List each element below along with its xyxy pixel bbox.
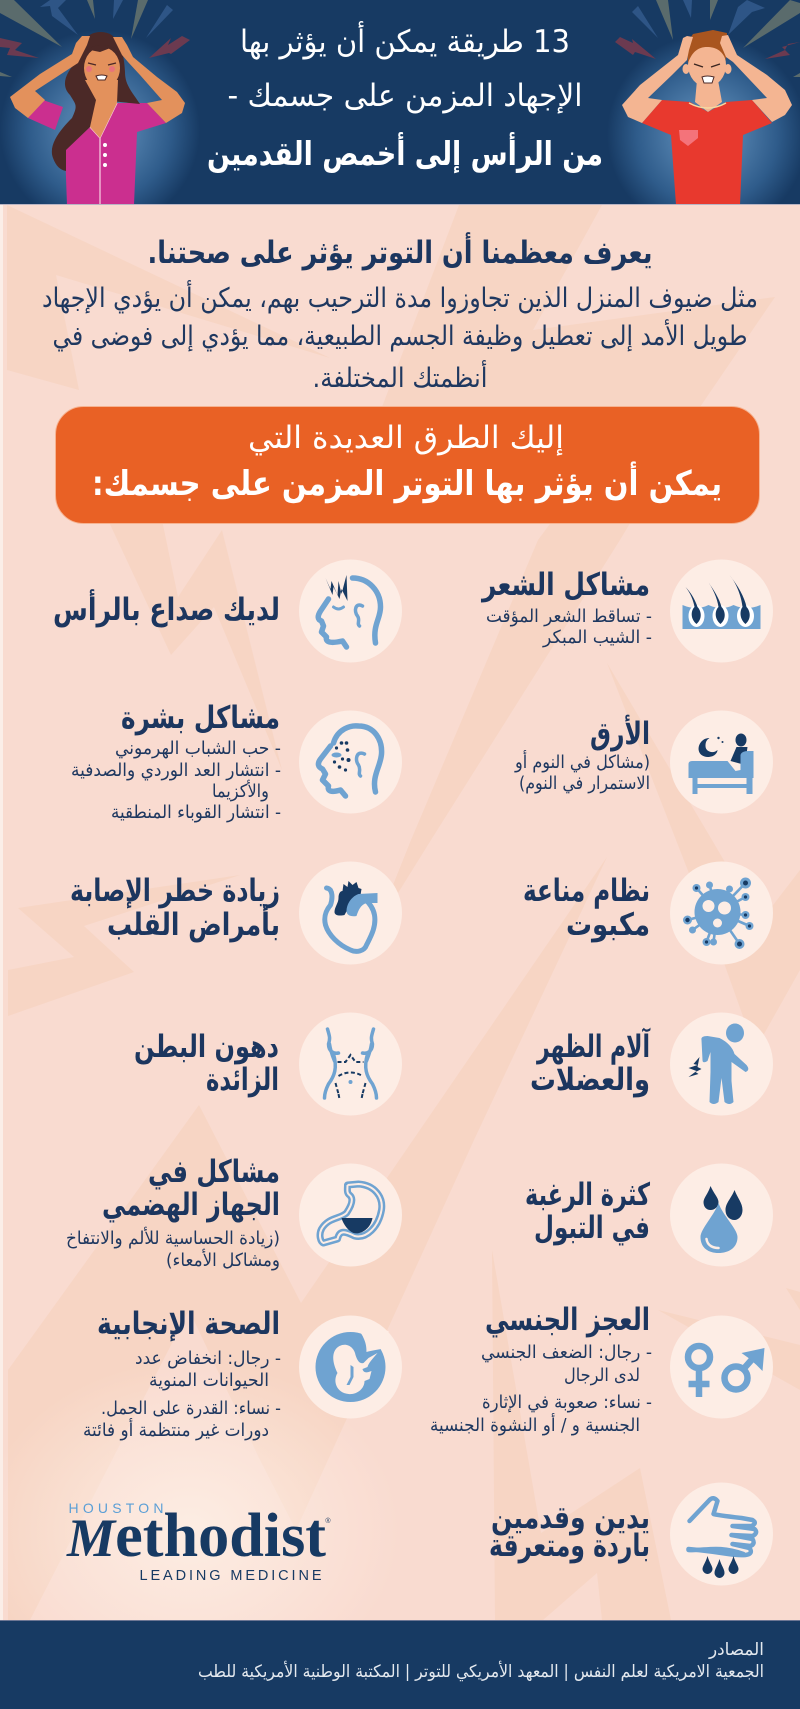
item: digestive problems [66, 1154, 402, 1271]
item: cold sweaty hands and feet: باردة ومتعرقة [489, 1528, 650, 1564]
item: sexual dysfunction: الجنسية و / أو النشوة الجنسية [430, 1413, 640, 1436]
icon: sleepless in bed [670, 710, 773, 814]
logo: Houston Methodist: ® [325, 1517, 331, 1525]
item: headache: لديك صداع بالرأس [53, 589, 280, 628]
item: back and muscle pain: والعضلات [530, 1062, 650, 1098]
illustration: stressed man [613, 0, 800, 204]
icon: heart [299, 862, 402, 964]
icon: fetus [299, 1316, 402, 1418]
item: reproductive health: دورات غير منتظمة أو فائتة [83, 1418, 269, 1441]
item: weak immune system: نظام مناعة [523, 873, 650, 909]
item: reproductive health: - رجال: انخفاض عدد [135, 1348, 281, 1369]
item: headache [53, 560, 402, 662]
callout: orange banner [56, 406, 760, 524]
item: digestive problems: الجهاز الهضمي [102, 1187, 280, 1223]
icon: drops [670, 1164, 773, 1266]
item: belly fat [134, 1012, 402, 1116]
item: insomnia: الاستمرار في النوم) [519, 773, 650, 794]
item: digestive problems: (زيادة الحساسية للألم والانتفاخ [66, 1227, 280, 1249]
item: frequent urination [525, 1164, 773, 1266]
title [207, 21, 603, 174]
item: sexual dysfunction: لدى الرجال [564, 1365, 640, 1386]
icon: head with lightning [299, 560, 402, 662]
item: back and muscle pain: آلام الظهر [536, 1027, 651, 1065]
logo: Houston Methodist: Methodist [66, 1502, 326, 1570]
item: sexual dysfunction: - نساء: صعوبة في الإثارة [482, 1392, 652, 1413]
item: skin problems: - حب الشباب الهرموني [115, 738, 281, 759]
item: heart disease: زيادة خطر الإصابة [70, 873, 280, 909]
item: belly fat: دهون البطن [134, 1029, 279, 1065]
title: 13 طريقة يمكن أن يؤثر بها [240, 21, 570, 60]
item: reproductive health: - نساء: القدرة على الحمل. [101, 1398, 281, 1419]
item: weak immune system: مكبوت [566, 907, 650, 943]
item: hair problems: - الشيب المبكر [542, 627, 652, 648]
item: heart disease [70, 862, 402, 964]
item: insomnia: (مشاكل في النوم أو [514, 750, 650, 773]
item: digestive problems: مشاكل في [148, 1154, 280, 1190]
title: من الرأس إلى أخمص القدمين [207, 132, 603, 174]
item: reproductive health: الصحة الإنجابية [97, 1306, 280, 1342]
item: reproductive health [83, 1306, 402, 1441]
item: insomnia [514, 710, 773, 814]
item: cold sweaty hands and feet: يدين وقدمين [491, 1500, 650, 1536]
item: sexual dysfunction: - رجال: الضعف الجنسي [481, 1342, 652, 1363]
logo: Houston Methodist: LEADING MEDICINE [140, 1568, 324, 1584]
item: skin problems: والأكزيما [212, 780, 269, 802]
item: hair problems [480, 560, 773, 662]
item: belly fat: الزائدة [206, 1062, 279, 1098]
icon: stomach [299, 1164, 402, 1266]
item: digestive problems: ومشاكل الأمعاء) [166, 1249, 280, 1271]
item: hair problems: مشاكل الشعر [480, 567, 650, 603]
item: frequent urination: في التبول [534, 1210, 650, 1246]
icon: waist [299, 1012, 402, 1116]
illustration: stressed woman [0, 0, 194, 204]
header band [0, 0, 800, 205]
callout: orange banner: إليك الطرق العديدة التي [248, 420, 564, 456]
logo: Houston Methodist: HOUSTON [68, 1500, 168, 1516]
icon: virus [670, 862, 773, 964]
item: heart disease: بأمراض القلب [107, 904, 280, 943]
footer: sources [0, 1620, 800, 1709]
intro text: أنظمتك المختلفة. [312, 359, 488, 394]
item: skin problems: مشاكل بشرة [121, 700, 280, 736]
title: الإجهاد المزمن على جسمك - [228, 78, 582, 114]
item: skin problems: - انتشار القوباء المنطقية [111, 802, 281, 823]
intro text: يعرف معظمنا أن التوتر يؤثر على صحتنا. [148, 232, 652, 271]
item: back and muscle pain [530, 1012, 773, 1116]
item: frequent urination: كثرة الرغبة [525, 1177, 651, 1213]
item: insomnia: الأرق [590, 714, 650, 752]
item: skin problems: - انتشار العد الوردي والصدفية [71, 760, 281, 781]
intro text [42, 232, 758, 394]
icon: face with acne [299, 710, 402, 814]
icon: gender symbols [670, 1316, 773, 1418]
item: skin problems [71, 700, 402, 823]
footer: sources: المصادر [708, 1640, 764, 1660]
icon: sweating hand [670, 1482, 773, 1586]
item: hair problems: - تساقط الشعر المؤقت [486, 606, 652, 627]
footer: sources: الجمعية الامريكية لعلم النفس | المعهد الأمريكي للتوتر | المكتبة الوطنية الأمريكية للطب [198, 1661, 764, 1682]
icon: hair follicles [670, 560, 773, 662]
icon: person with back pain [670, 1012, 773, 1116]
item: cold sweaty hands and feet [489, 1482, 773, 1586]
item: sexual dysfunction: العجز الجنسي [485, 1302, 650, 1338]
item: sexual dysfunction [430, 1302, 773, 1436]
item: reproductive health: الحيوانات المنوية [149, 1370, 269, 1391]
item: weak immune system [523, 862, 773, 964]
